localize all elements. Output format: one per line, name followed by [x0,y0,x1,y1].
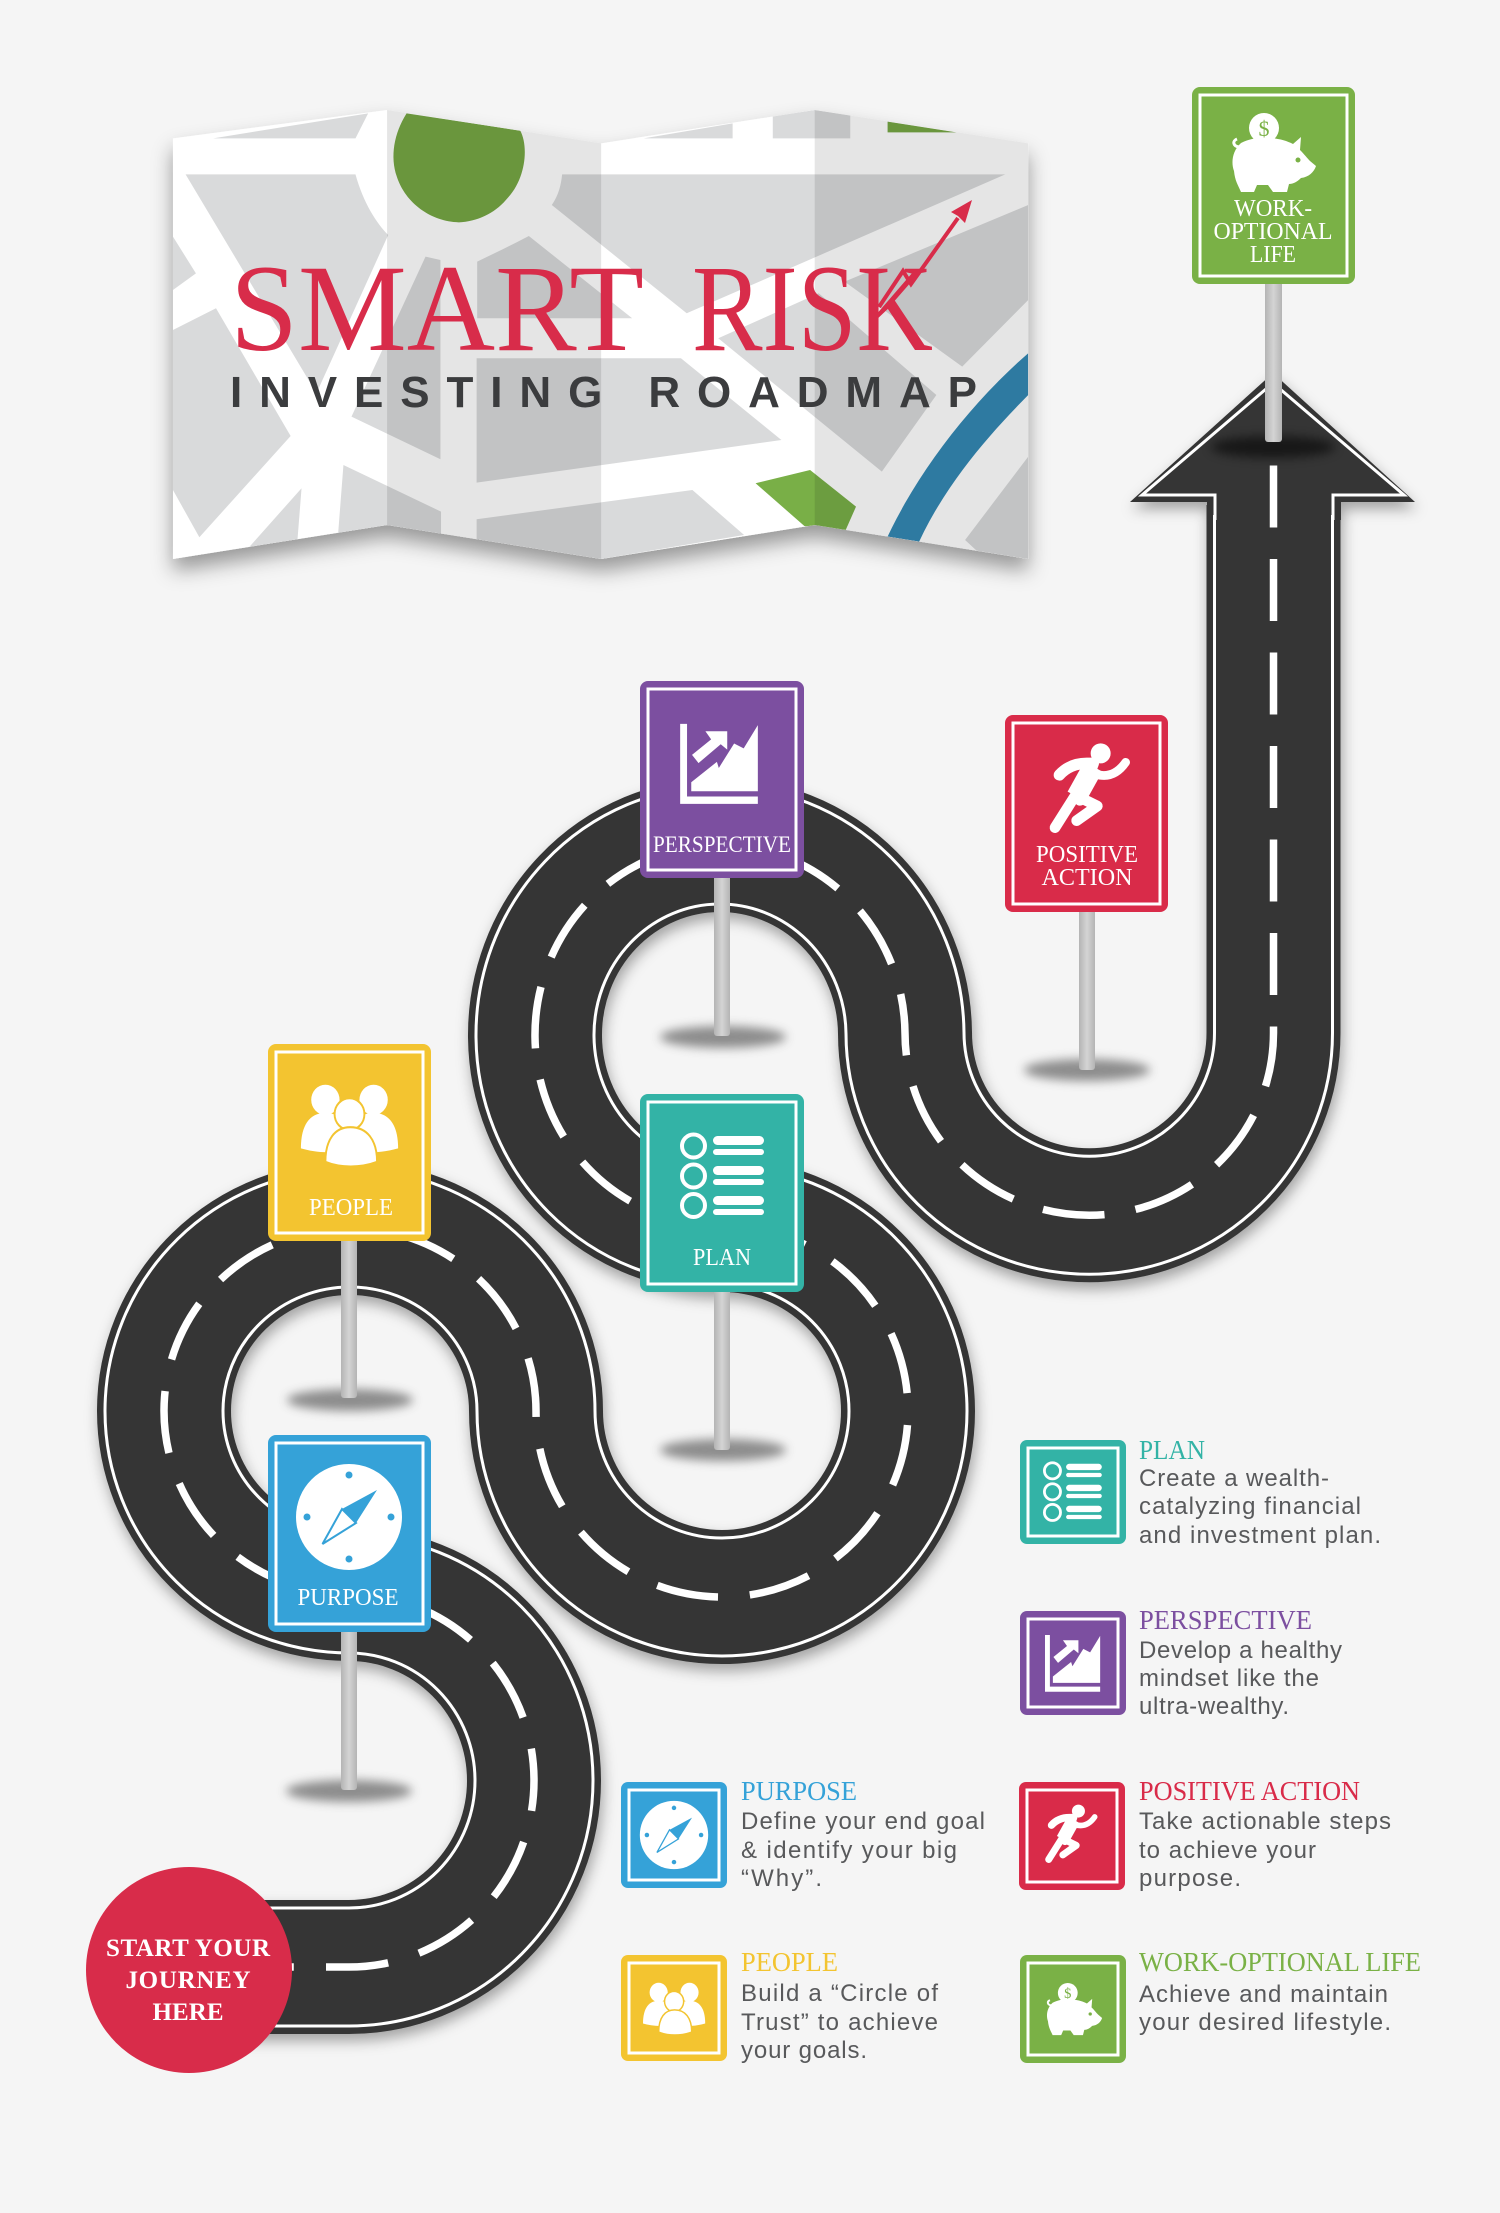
subtitle: investing roadmap: INVESTING ROADMAP [230,368,977,417]
icon: people [301,1085,398,1166]
sign: perspective [640,681,804,1036]
sign: perspective: PERSPECTIVE [653,832,791,857]
road centre dashes [164,463,1274,1967]
title: smart risk [230,240,933,377]
legend: work-optional life: WORK-OPTIONAL LIFE [1139,1947,1421,1977]
pole shadows [286,1026,1150,1802]
sign: positive action: POSITIVE [1036,842,1138,868]
map illustration [150,80,1068,580]
legend: purpose: “Why”. [741,1865,822,1892]
folded map with title [150,80,1068,580]
legend: positive action: to achieve your [1139,1837,1316,1864]
legend: people: Build a “Circle of [741,1980,938,2007]
sign: people: PEOPLE [309,1195,393,1221]
sign: positive action [1005,715,1168,1070]
legend: purpose: & identify your big [741,1837,957,1864]
sign: people [268,1044,431,1398]
legend: work-optional life: Achieve and maintain [1139,1981,1388,2008]
legend: purpose: Define your end goal [741,1808,985,1835]
sign: positive action: ACTION [1042,865,1132,891]
start marker: HERE [152,1999,224,2026]
legend icon: growth chart [1045,1635,1100,1692]
legend: people [621,1947,938,2064]
icon: red rising arrow [879,200,972,307]
legend: plan: PLAN [1139,1435,1205,1465]
winding road with arrow head [164,373,1415,1967]
legend: positive action: purpose. [1139,1865,1241,1892]
legend: work-optional life: your desired lifestyle. [1139,2009,1391,2036]
legend: positive action [1019,1776,1391,1892]
legend: work-optional life [1020,1947,1421,2063]
legend: perspective: Develop a healthy [1139,1637,1342,1664]
sign: work-optional life: WORK- [1234,196,1312,222]
road surface [164,373,1415,1967]
sign: work-optional life: OPTIONAL [1214,219,1332,245]
sign: plan [640,1094,804,1450]
start marker: START YOUR [106,1935,271,1962]
icon: compass [296,1464,402,1570]
icon: checklist [682,1134,764,1217]
legend icon: piggy bank [1047,1983,1102,2035]
legend: plan [1020,1435,1381,1549]
sign: work-optional life [1192,87,1355,442]
icon: piggy bank: $ [1258,116,1270,141]
legend icon: runner [1049,1805,1095,1859]
legend: perspective: ultra-wealthy. [1139,1693,1289,1720]
legend icon: checklist [1044,1463,1102,1520]
icon: runner [1055,743,1126,828]
legend: positive action: POSITIVE ACTION [1139,1776,1360,1806]
shadow of final sign pole [1211,436,1335,458]
legend: people: Trust” to achieve [741,2009,938,2036]
legend: purpose: PURPOSE [741,1776,857,1806]
sign: work-optional life: LIFE [1250,242,1296,268]
legend: perspective [1020,1605,1342,1720]
title: smart risk: SMART [230,240,644,377]
title: smart risk: RISK [692,240,933,377]
legend icon: piggy bank: $ [1064,1986,1071,2002]
start marker: JOURNEY [126,1967,250,1994]
icon: growth chart [680,724,758,804]
icon: piggy bank [1232,113,1316,192]
legend icon: people [643,1983,705,2035]
legend: positive action: Take actionable steps [1139,1808,1391,1835]
sign: purpose [268,1435,431,1790]
legend: perspective: PERSPECTIVE [1139,1605,1312,1635]
legend: plan: catalyzing financial [1139,1493,1361,1520]
legend: people: PEOPLE [741,1947,838,1977]
start marker [86,1867,292,2073]
legend: purpose [621,1776,985,1892]
legend: perspective: mindset like the [1139,1665,1319,1692]
sign: plan: PLAN [693,1245,751,1271]
sign: purpose: PURPOSE [298,1585,398,1611]
legend icon: compass [640,1801,708,1869]
legend: plan: and investment plan. [1139,1522,1381,1549]
legend: people: your goals. [741,2037,867,2064]
legend: plan: Create a wealth- [1139,1465,1329,1492]
